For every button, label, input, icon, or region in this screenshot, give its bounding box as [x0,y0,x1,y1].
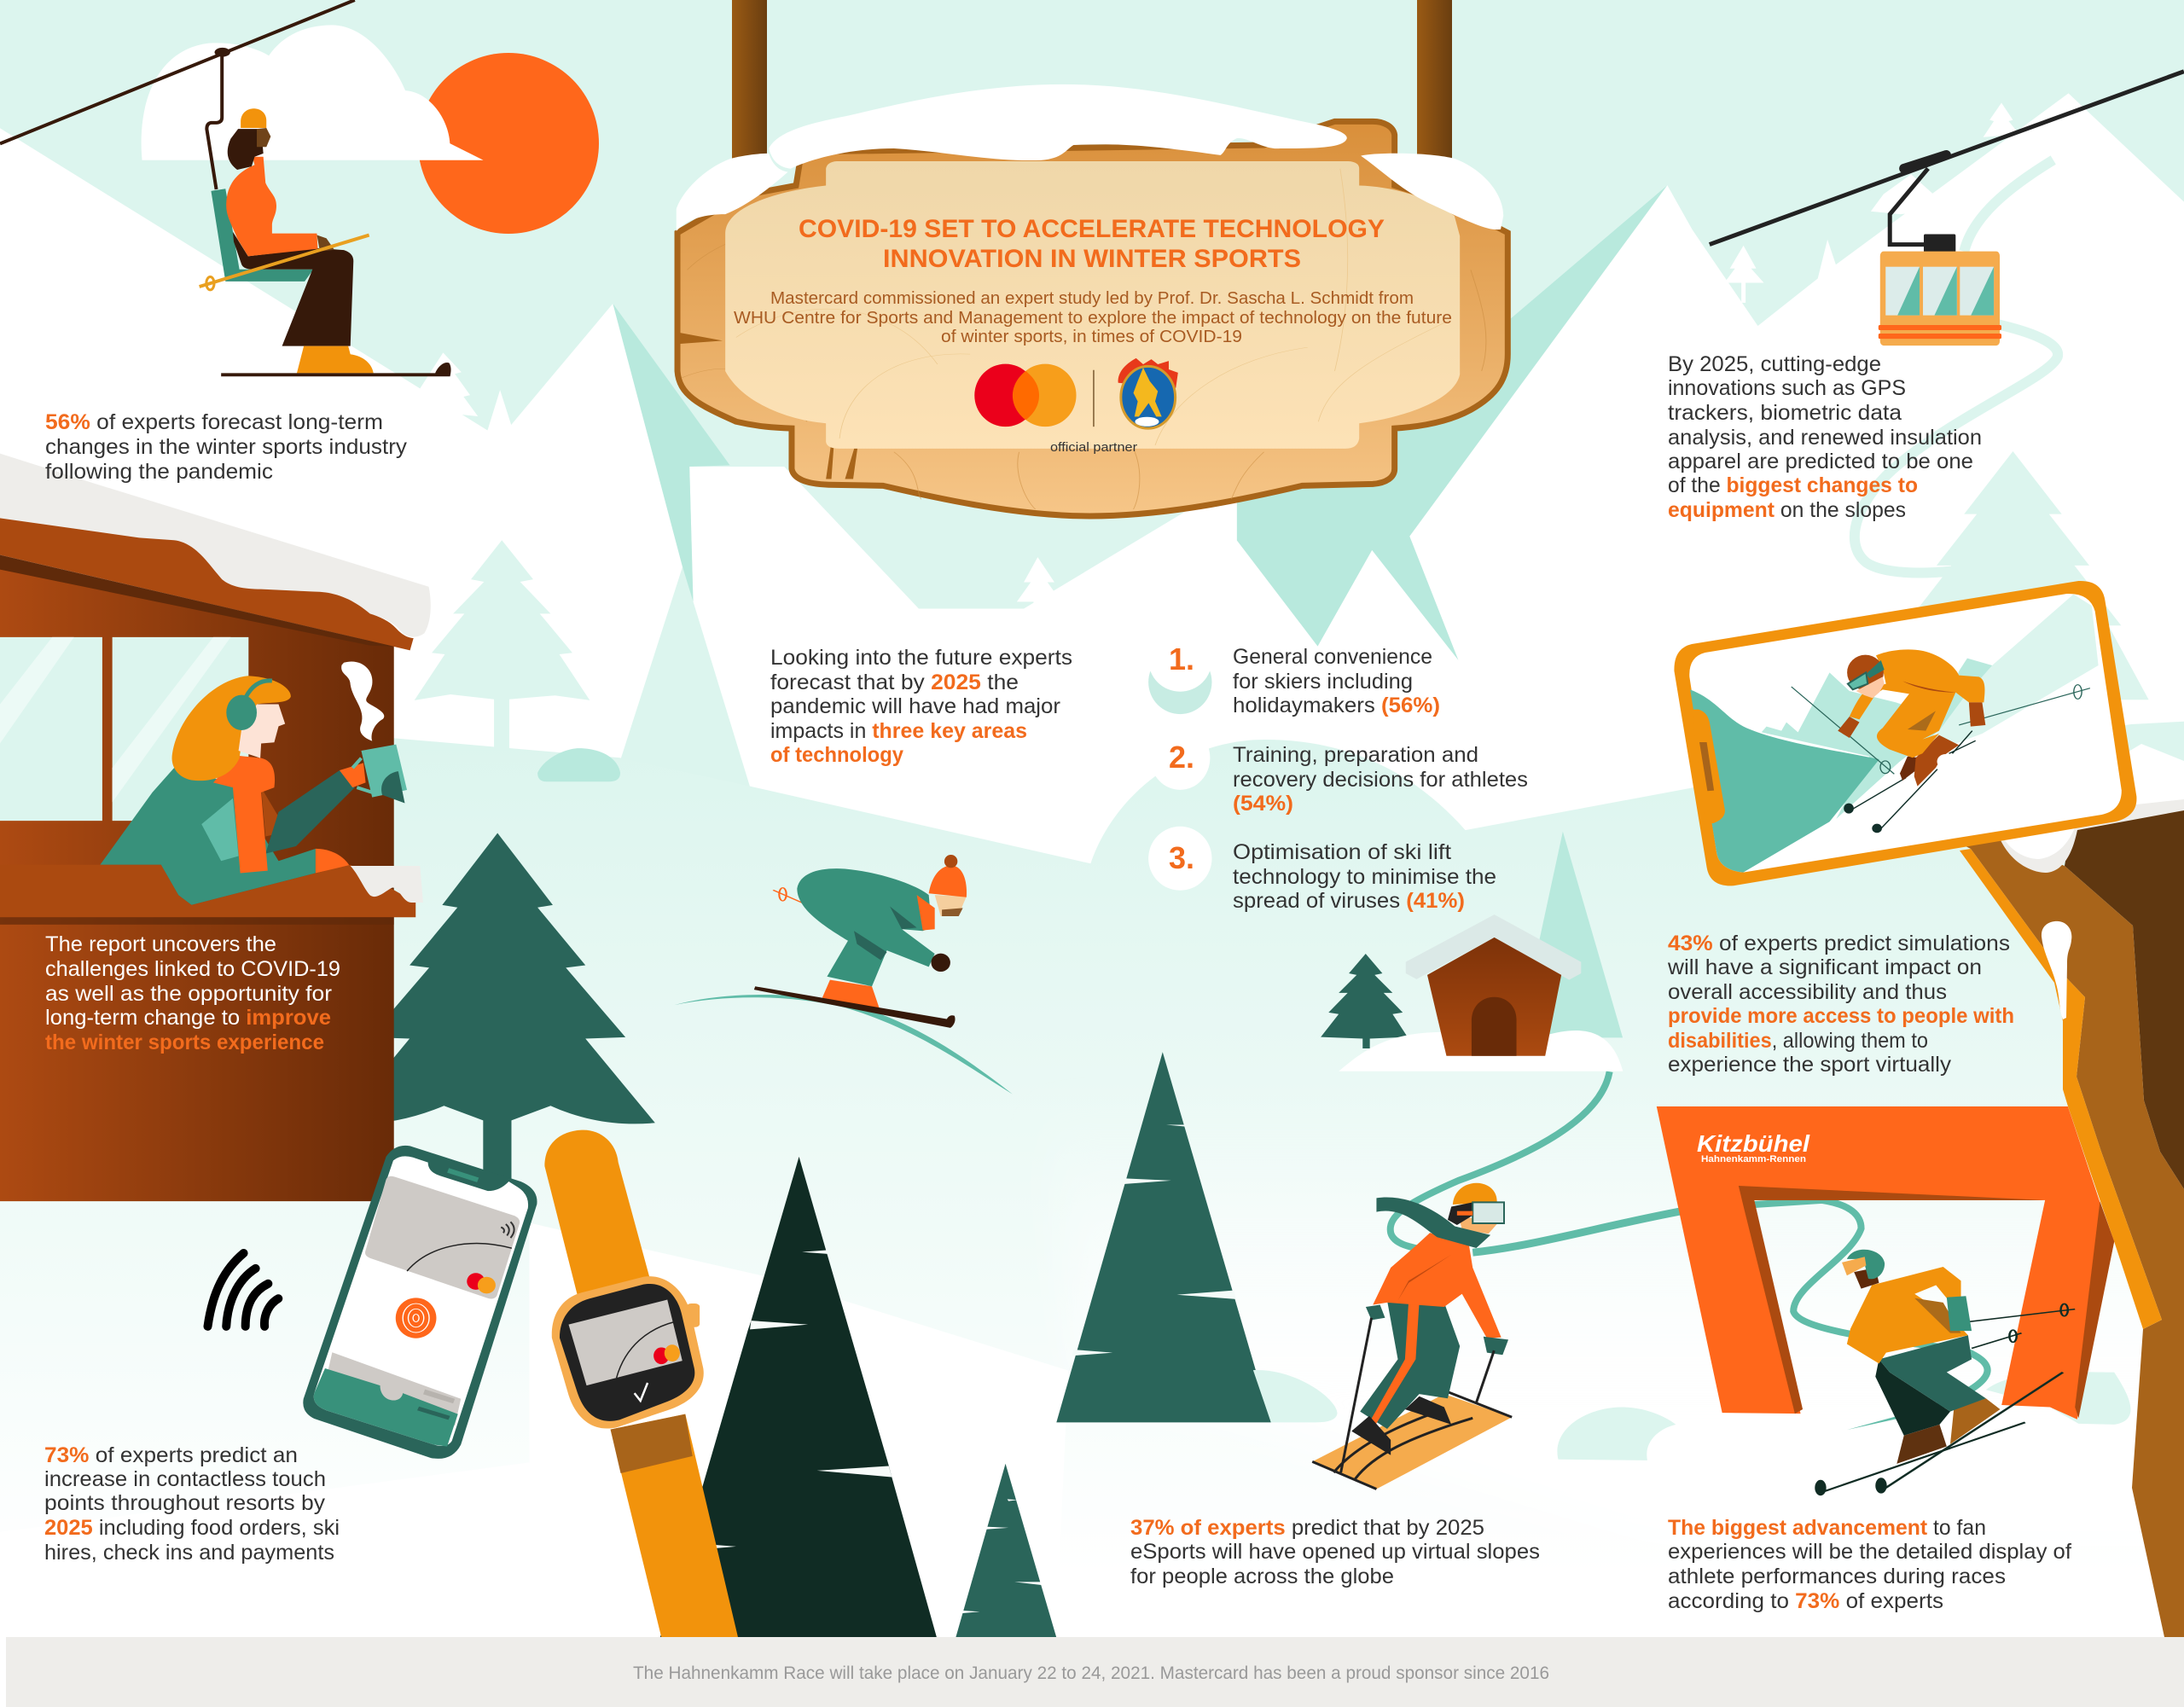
list item 3: technology to minimise the [1233,865,1496,889]
phone with skier, landscape [1674,581,2136,885]
text: fan experiences: according to 73% of experts [1668,1589,1943,1613]
dark leg [1875,1359,1950,1436]
wallet [314,1368,458,1447]
text: esports: for people across the globe [1130,1565,1394,1588]
badge 3 [1148,827,1211,891]
arm [1890,169,1928,245]
mint cone tree by the cabin [1519,832,1623,1037]
neck scarf [917,895,935,930]
collar [201,798,239,861]
back boot [1900,757,1920,781]
gondola lift [1710,72,2184,345]
text: fan experiences [1668,1516,2071,1613]
phone frame [1674,581,2136,885]
board [1312,1394,1512,1489]
badge 2 [1150,726,1210,790]
goggles [1848,672,1867,689]
small tree [956,1464,1056,1637]
title: COVID-19 SET TO ACCELERATE TECHNOLOGY [799,215,1385,243]
text: three key areas [770,646,1072,767]
text: contactless: 73% of experts predict an [44,1443,298,1467]
finish gate [1657,1106,2114,1430]
ski trail, top right [1855,160,2058,572]
text: simulations [1667,932,2014,1077]
chairlift cable [0,0,355,143]
roof [0,518,414,650]
ski jumper [675,855,1013,1094]
text: equipment: By 2025, cutting-edge [1668,352,1881,376]
list item 1: General convenience [1233,645,1432,669]
official partner: official partner [1050,440,1137,455]
payment card [365,1176,520,1298]
fingerprint [396,1298,436,1338]
scarf [1376,1198,1490,1248]
small white pine on left ridge [420,352,487,431]
background mint pine, top right [1877,451,2149,700]
text: esports: 37% of experts predict that by 2025 [1130,1516,1484,1540]
goggles [1842,1257,1866,1275]
hat [241,108,266,128]
front boot [1914,735,1959,787]
white snow slope, lower centre [0,1223,1068,1638]
ski tips [1815,1478,1887,1495]
text: simulations: experience the sport virtually [1668,1053,1952,1077]
door [1472,997,1517,1056]
screen mountains [1762,672,1939,819]
snow inner [1988,819,2075,859]
mountains [0,93,2184,891]
badge 1 [1148,628,1211,714]
speaker [447,1168,479,1182]
hand [340,763,366,787]
snowy ground [0,722,2184,1707]
text: equipment: trackers, biometric data [1668,401,1902,425]
check mark [635,1383,648,1401]
hat [929,866,967,897]
suit [1850,649,1984,758]
hanger [206,55,222,189]
balcony [0,865,415,917]
boots [1950,1398,2001,1444]
cone trees [660,1052,1271,1637]
suit [797,868,935,986]
beard [942,908,963,916]
right rock cliff [1960,799,2184,1637]
card arc [407,1244,512,1271]
pole [773,888,863,929]
small pine [1321,954,1408,1048]
snow drip [2042,921,2071,1019]
upper strap [544,1130,649,1296]
text: long-term changes [45,410,408,484]
smartphone [303,1146,537,1459]
text: report challenges: the winter sports experience [45,1031,324,1054]
crown [687,1303,700,1327]
text: contactless: points throughout resorts by [44,1491,326,1515]
pompom [944,855,957,868]
dark rock [2065,810,2184,1189]
list item 1: holidaymakers (56%) [1233,694,1440,717]
text: equipment: innovations such as GPS [1668,376,1906,400]
roof snow [0,454,431,637]
snow, centre [769,84,1347,169]
trouser stripe [1369,1303,1420,1426]
text: three key areas: Looking into the future experts [770,646,1072,670]
light inner panel [725,161,1460,449]
text: report challenges: long-term change to improve [45,1006,331,1030]
text: equipment: apparel are predicted to be one [1668,450,1973,473]
cable clamp [215,48,230,57]
list item 3: spread of viruses (41%) [1233,889,1465,913]
card nfc [501,1222,514,1238]
woman, body [100,768,316,905]
gloves [1366,1304,1508,1355]
goggle strap [1866,660,1885,678]
text: fan experiences: experiences will be the detailed display of [1668,1540,2071,1564]
skis [1822,1373,2063,1492]
roof snow [1406,914,1581,980]
white slope, rock foot [2082,744,2184,819]
cloud [142,25,484,160]
screen slope [1690,689,1879,873]
chalet [0,454,431,1201]
text: report challenges: challenges linked to COVID-19 [45,957,340,981]
ski pole [200,235,369,287]
gate shading [1739,1186,2114,1418]
text: fan experiences: The biggest advancement to fan [1668,1516,1986,1540]
sign poles [732,0,1452,162]
helmet [1847,655,1884,690]
hair [228,129,264,170]
text: long-term changes: following the pandemic [45,460,273,484]
cabin windows [1885,267,1994,316]
text: long-term changes: 56% of experts forecast long-term [45,410,383,434]
snowboard boarder [1312,1183,1512,1489]
watch screen [560,1284,694,1421]
poles [1341,1318,1494,1472]
gate frame [1657,1106,2114,1420]
text: equipment: equipment on the slopes [1668,498,1906,522]
list item 1: 1. [1169,642,1194,676]
balcony snow [351,866,423,903]
face [239,705,285,758]
torso [226,157,317,256]
jacket [1847,1267,1968,1363]
background mint pine and mound, left [415,540,590,758]
small white pines on right ridge [1724,103,2019,303]
text: simulations: will have a significant impact on [1667,955,1982,979]
text: simulations: 43% of experts predict simulations [1668,932,2010,955]
snow, left [677,154,788,231]
list item 3: 3. [1169,840,1194,875]
list item 2: (54%) [1233,792,1293,816]
ski trails through gate [1391,1071,1693,1252]
lower sleeve [316,849,350,874]
title: INNOVATION IN WINTER SPORTS [883,245,1301,273]
mastercard logo [974,364,1077,427]
scarf back [261,787,288,836]
watch card logo [653,1344,680,1364]
ski tips [1844,804,1882,833]
boots [1351,1396,1451,1455]
text: three key areas: impacts in three key areas [770,719,1027,743]
list item 2: recovery decisions for athletes [1233,768,1528,792]
screen peak [1939,659,1992,731]
wallet bars [417,1390,455,1420]
goggles [1457,1202,1504,1223]
list item 1: for skiers including [1233,670,1413,694]
gloves [1838,702,1985,738]
boot [297,346,374,373]
suit crease [1902,681,1955,693]
text: contactless: increase in contactless touch [44,1467,326,1491]
panel grain [736,169,1449,445]
text: contactless: hires, check ins and payments [44,1541,334,1565]
hair [172,676,291,781]
text: three key areas: forecast that by 2025 the [770,671,1019,694]
snow band [2001,799,2184,873]
text: report challenges: The report uncovers the [45,932,276,956]
gondola cable [1710,72,2184,245]
face [1856,676,1885,698]
kitzbuhel logo text: Kitzbühel [1697,1130,1810,1157]
text: report challenges [45,932,340,1054]
chalet-side green pine [340,833,655,1204]
sign subtitle [734,288,1452,346]
orange strip [1960,849,2162,1329]
boot [822,980,880,1009]
racer [1815,1250,2075,1495]
strap band [611,1414,693,1473]
helmet [1847,1250,1885,1279]
contactless icon [207,1253,278,1327]
cabin body [1427,938,1561,1056]
text: simulations: disabilities, allowing them to [1668,1029,1928,1053]
lower strap [611,1414,738,1637]
kitzbuhel logo text: Hahnenkamm-Rennen [1701,1154,1806,1164]
hair [1448,1202,1472,1225]
screen skier [1792,649,2090,833]
chair seat [211,189,313,282]
chalet wall [0,567,394,1201]
notch pill [1699,742,1714,791]
wood grain [682,223,1486,509]
phone screen [314,1156,528,1446]
text: contactless: 2025 including food orders, ski [44,1516,340,1540]
snow, right [1361,154,1503,229]
cabin top [1924,235,1955,253]
ski [221,363,451,376]
windows [0,637,248,821]
footer bar [6,1637,2184,1707]
suit shade [854,907,917,961]
text: fan experiences: athlete performances during races [1668,1565,2006,1588]
smartwatch [544,1130,738,1637]
dark tree [660,1157,937,1637]
screen pine [1929,595,2099,753]
sign subtitle: of winter sports, in times of COVID-19 [941,327,1242,346]
jacket shade [1398,1255,1451,1300]
roof shadow [0,554,394,647]
light rock [1962,840,2184,1637]
head [1854,1268,1879,1289]
cabin [1880,252,2000,345]
poles [1792,685,2090,774]
text: esports: eSports will have opened up virtual slopes [1130,1540,1540,1564]
glove [317,235,334,252]
text: equipment: analysis, and renewed insulation [1668,426,1982,450]
phone screen [1689,594,2122,873]
small cabin [1321,914,1623,1071]
text: long-term changes: changes in the winter sports industry [45,435,408,459]
poles [1947,1303,2075,1349]
trousers [1879,1335,1986,1412]
card logo [467,1273,496,1293]
mint mound [537,748,620,781]
landing curve [675,995,1013,1094]
jacket [1373,1233,1502,1338]
earmuff [226,695,257,730]
board cracks [677,332,860,479]
text: simulations: provide more access to people with [1668,1004,2014,1028]
list item 3 [1169,840,1496,913]
list item 1 [1169,642,1440,717]
logo divider [1093,370,1095,427]
list item 2: Training, preparation and [1233,743,1478,767]
face [1459,1216,1497,1234]
list item 2: 2. [1169,740,1194,775]
wooden board [677,121,1507,516]
text: three key areas: of technology [770,743,903,767]
mug [352,745,407,803]
suit shade [1908,711,1936,731]
ski [754,986,956,1028]
hahnenkamm crest [1118,358,1178,428]
scarf [213,756,275,874]
text: equipment [1668,352,1982,522]
watch card arc [617,1321,675,1378]
cabin stripes [1879,325,2001,339]
glove [931,954,950,972]
balcony shadow [0,917,394,925]
steam [341,661,384,741]
watch card [568,1300,682,1385]
legs [233,232,353,346]
trousers [1360,1300,1460,1429]
snow spray [1937,754,1955,769]
mint snow bumps [1253,1370,2130,1460]
hanging sign [677,0,1507,516]
arm [265,770,355,854]
chairlift woman [0,0,451,376]
list item 2 [1169,740,1528,816]
text: report challenges: as well as the opportunity for [45,982,332,1006]
skis [1853,731,1976,830]
sign subtitle: WHU Centre for Sports and Management to explore the impact of technology on the future [734,308,1452,328]
face [257,128,270,147]
sign subtitle: Mastercard commissioned an expert study led by Prof. Dr. Sascha L. Schmidt from [770,288,1414,308]
text: esports [1130,1516,1540,1588]
snow mound [1339,1031,1623,1071]
footer text: The Hahnenkamm Race will take place on January 22 to 24, 2021. Mastercard has been a proud sponsor since 2016 [633,1663,1549,1683]
gloves [1947,1296,1972,1331]
hat [1453,1183,1497,1205]
face [935,895,967,916]
jacket shade [1914,1298,1961,1333]
text: simulations: overall accessibility and thus [1668,980,1947,1004]
text: equipment: of the biggest changes to [1668,473,1918,497]
sun [418,53,599,234]
number badges [1148,628,1211,891]
list item 3: Optimisation of ski lift [1233,840,1451,864]
wallet card [323,1352,461,1425]
text: three key areas: pandemic will have had major [770,694,1060,718]
clamp [1904,154,1946,169]
text: contactless [44,1443,340,1565]
watch case [552,1276,704,1429]
white snow fade, lower right [1031,1024,2184,1546]
phone body [303,1146,537,1459]
phone notch [1692,710,1725,823]
middle tree [1056,1052,1271,1422]
title [799,215,1385,273]
